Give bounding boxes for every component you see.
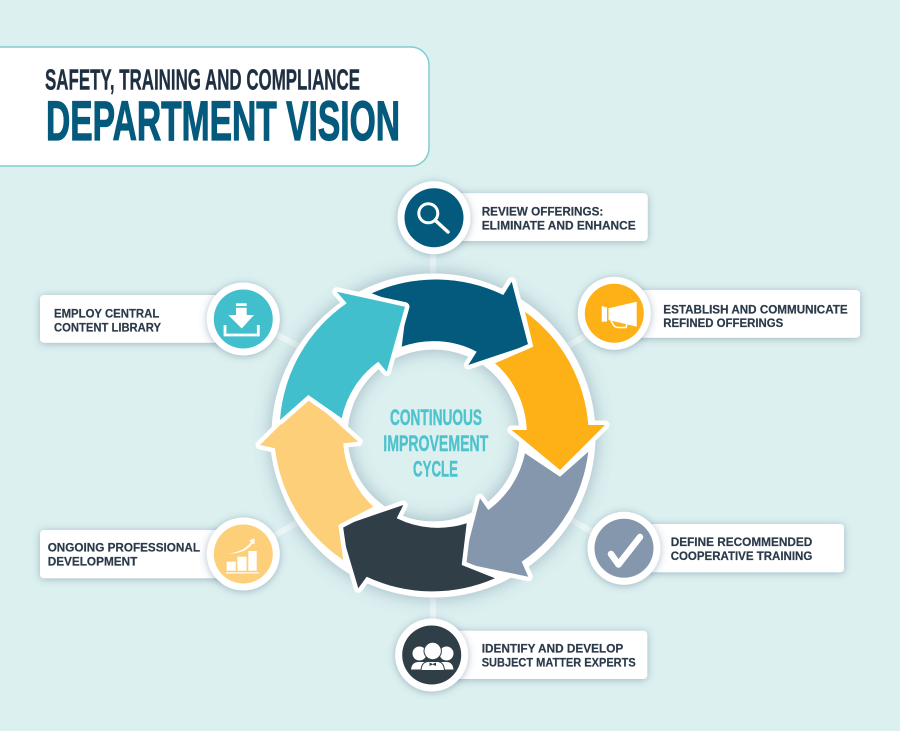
icon: magnifier <box>419 204 448 232</box>
arrow: light orange <box>260 397 373 560</box>
arrow: charcoal <box>340 505 495 591</box>
centre label: CONTINUOUS <box>390 405 482 430</box>
step: identify and develop experts <box>395 618 647 692</box>
icon: check mark <box>611 537 640 564</box>
cycle ring <box>260 279 605 591</box>
step: identify and develop experts: SUBJECT MATTER EXPERTS <box>482 656 636 670</box>
icon: people <box>410 642 454 670</box>
step: employ central content library: CONTENT LIBRARY <box>54 320 161 334</box>
arrow: orange <box>495 312 605 470</box>
centre label <box>383 405 489 482</box>
icon: download <box>225 303 258 335</box>
step: define recommended training <box>588 512 844 585</box>
connector lines <box>272 250 596 622</box>
step: ongoing professional development: DEVELOPMENT <box>48 554 138 568</box>
step: review offerings <box>398 181 648 254</box>
step: employ central content library: EMPLOY CENTRAL <box>54 306 159 320</box>
step: identify and develop experts: IDENTIFY AND DEVELOP <box>482 642 623 656</box>
step: establish and communicate: REFINED OFFERINGS <box>663 316 783 330</box>
icon: growth chart <box>226 538 259 574</box>
title: subtitle line: SAFETY, TRAINING AND COMPLIANCE <box>45 64 360 96</box>
arrow: teal <box>280 292 405 420</box>
title: main heading: DEPARTMENT VISION <box>46 89 400 152</box>
step: establish and communicate <box>578 277 860 350</box>
arrow: dark blue <box>372 279 528 365</box>
icon: megaphone <box>602 302 637 328</box>
step: ongoing professional development: ONGOING PROFESSIONAL <box>48 541 200 555</box>
centre label: CYCLE <box>413 457 458 482</box>
title card <box>0 47 429 166</box>
arrow: grey blue <box>463 452 588 577</box>
step: define recommended training: COOPERATIVE TRAINING <box>671 549 812 563</box>
centre label: IMPROVEMENT <box>383 431 489 456</box>
step: review offerings: REVIEW OFFERINGS: <box>482 205 603 219</box>
step: review offerings: ELIMINATE AND ENHANCE <box>482 218 636 232</box>
step: ongoing professional development <box>40 518 280 590</box>
step: establish and communicate: ESTABLISH AND COMMUNICATE <box>663 302 848 316</box>
step: define recommended training: DEFINE RECOMMENDED <box>671 535 813 549</box>
step: employ central content library <box>40 282 280 356</box>
